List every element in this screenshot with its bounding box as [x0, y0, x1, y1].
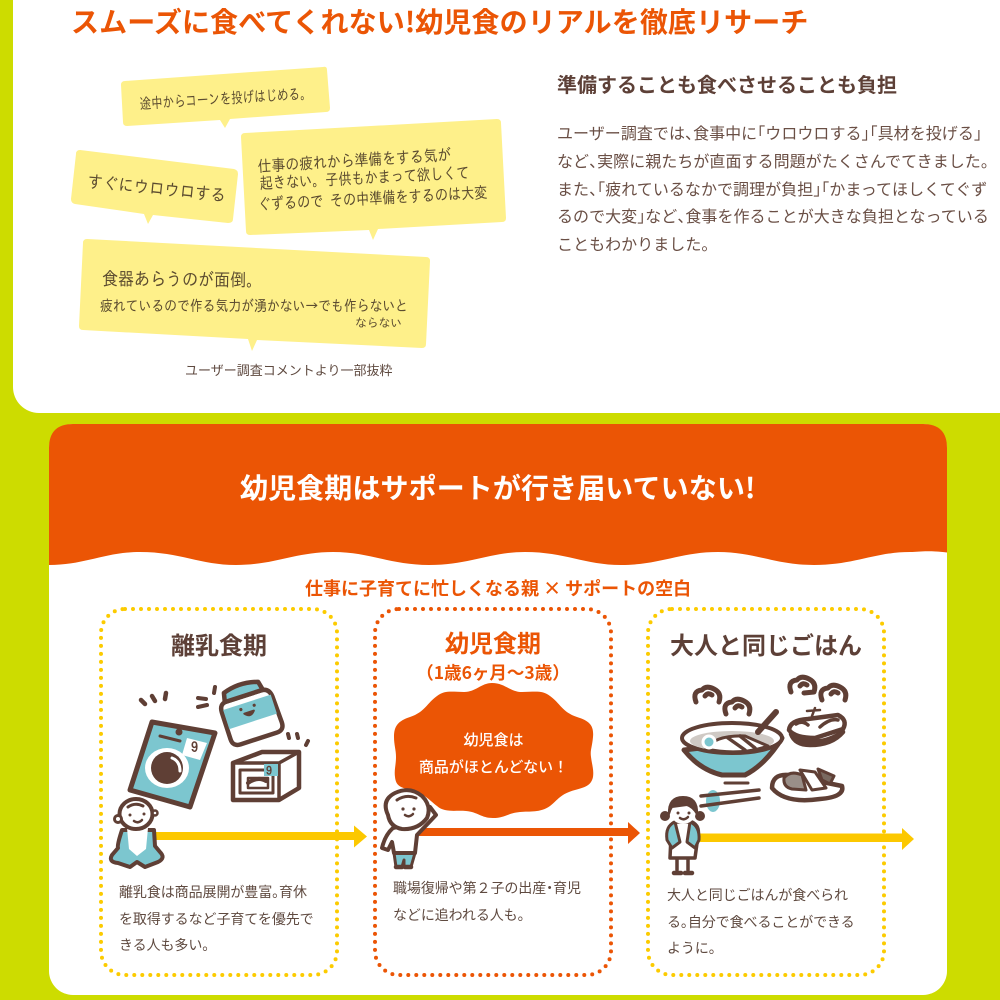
- note: washing dishes: ならない: [355, 317, 402, 329]
- icon: noodle bowl and steam: [682, 677, 846, 783]
- card text: adult food: [667, 885, 855, 958]
- card text: adult food: る。自分で食べることができる: [667, 912, 855, 932]
- icon: washing machine: 9: [191, 740, 198, 754]
- card text: toddler: などに追われる人も。: [393, 904, 532, 924]
- title: スムーズに食べてくれない!幼児食のリアルを徹底リサーチ: [71, 1, 808, 41]
- subheading: 仕事に子育てに忙しくなる親 × サポートの空白: [305, 575, 691, 601]
- note: wandering around: すぐにウロウロする: [87, 173, 227, 205]
- note: washing dishes: [79, 239, 430, 351]
- icon: formula tin: [215, 676, 284, 747]
- card text: adult food: 大人と同じごはんが食べられ: [667, 885, 848, 905]
- arrow: weaning timeline: [150, 826, 367, 848]
- band heading: 幼児食期はサポートが行き届いていない!: [240, 467, 755, 507]
- card heading: weaning: 離乳食期: [171, 626, 267, 661]
- arrow: toddler timeline: [415, 822, 640, 844]
- card outline: adult food: [648, 609, 884, 975]
- research body text: また、「疲れているなかで調理が負担」「かまってほしくてぐず: [557, 176, 987, 200]
- note: wandering around: [71, 150, 238, 224]
- research body text: ユーザー調査では、食事中に「ウロウロする」「具材を投げる」: [557, 120, 982, 144]
- research body text: こともわかりました。: [557, 231, 717, 255]
- card text: adult food: ように。: [667, 938, 723, 958]
- note: throwing corn: [121, 67, 330, 128]
- icon: sitting baby: [111, 799, 163, 867]
- card text: toddler: [393, 878, 581, 924]
- note: tired from work: [241, 119, 506, 240]
- icon: motion marks above microwave: [288, 734, 308, 745]
- card outline: toddler: [375, 609, 611, 975]
- icon: girl with pigtails: [660, 797, 705, 873]
- note: washing dishes: 食器あらうのが面倒。: [102, 269, 262, 289]
- icon: microwave: [233, 752, 299, 800]
- note: throwing corn: 途中からコーンを投げはじめる。: [139, 85, 312, 111]
- icon: microwave: 9: [266, 764, 272, 777]
- research body text: など、実際に親たちが直面する問題がたくさんでてきました。: [557, 148, 997, 172]
- card subheading: age range: （1歳6ヶ月〜3歳）: [416, 660, 570, 685]
- icon: chopsticks: [701, 790, 759, 812]
- arrow: adult food timeline: [690, 828, 914, 850]
- research body text: るので大変」など、食事を作ることが大きな負担となっている: [557, 203, 989, 227]
- card outline: weaning: [101, 609, 337, 975]
- header band with wave: [49, 424, 947, 565]
- card text: toddler: 職場復帰や第２子の出産・育児: [393, 878, 581, 898]
- card text: weaning: を取得するなど子育てを優先で: [119, 908, 314, 928]
- research body text: [557, 120, 997, 255]
- blob text: [419, 729, 568, 777]
- icon: washing machine: [130, 687, 215, 807]
- icon: pointing toddler: [382, 790, 436, 867]
- panel: support gap panel: [49, 424, 947, 995]
- icon: side dish lower plate: [772, 769, 842, 800]
- card text: weaning: 離乳食は商品展開が豊富。育休: [119, 882, 307, 902]
- notes caption: ユーザー調査コメントより一部抜粋: [185, 360, 392, 379]
- blob text: 商品がほとんどない！: [419, 756, 568, 777]
- card text: weaning: きる人も多い。: [119, 935, 216, 955]
- card heading: toddler: 幼児食期: [445, 624, 541, 659]
- icon: side dish upper plate: [789, 708, 845, 745]
- panel: top research panel: [13, 0, 1000, 413]
- speech blob: [394, 683, 593, 818]
- note: tired from work: 起きない。子供もかまって欲しくて: [259, 164, 470, 191]
- research column heading: 準備することも食べさせることも負担: [557, 69, 897, 98]
- note: washing dishes: 疲れているので作る気力が湧かない→でも作らないと: [100, 298, 408, 313]
- note: tired from work: ぐずるので その中準備をするのは大変: [257, 184, 488, 212]
- note: tired from work: 仕事の疲れから準備をする気が: [257, 146, 452, 174]
- card heading: adult food: 大人と同じごはん: [670, 626, 862, 661]
- blob text: 幼児食は: [463, 729, 524, 750]
- card text: weaning: [119, 882, 314, 955]
